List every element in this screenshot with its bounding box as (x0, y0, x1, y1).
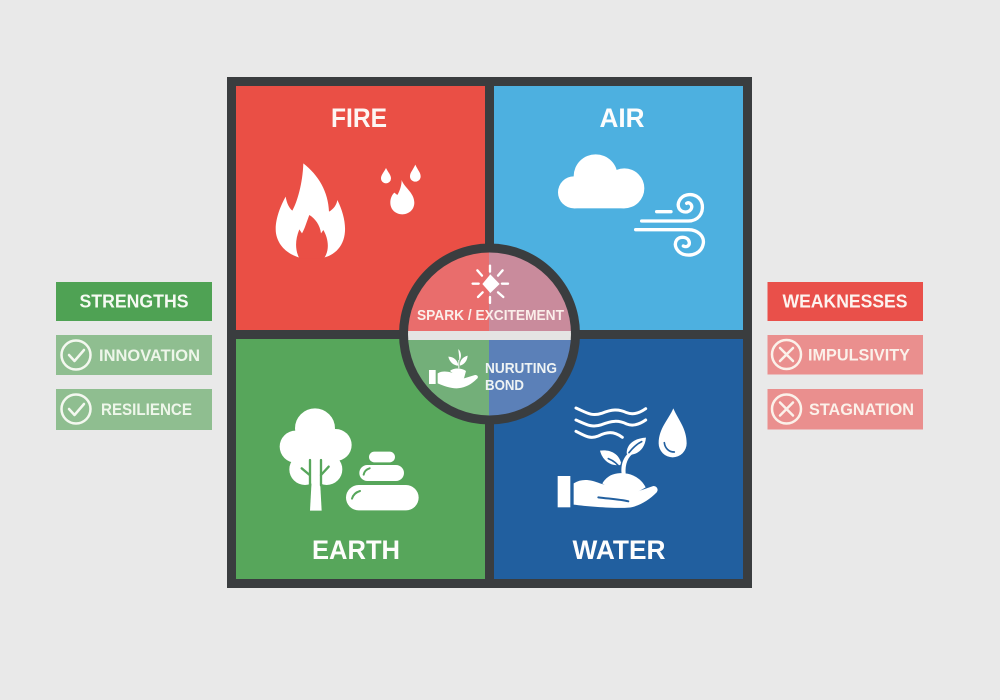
heading: strengths (56, 282, 212, 321)
panel: weaknesses (768, 282, 923, 430)
item: stagnation (768, 389, 923, 430)
heading: water: WATER (572, 535, 666, 565)
icon: cloud and wind (558, 154, 703, 255)
item: stagnation: STAGNATION (809, 400, 914, 419)
panel: four elements matrix (227, 77, 752, 588)
panel: air (494, 86, 743, 330)
panel: strengths (56, 282, 212, 430)
label: spark / excitement: SPARK / EXCITEMENT (417, 307, 564, 324)
panel: earth (236, 339, 485, 579)
label: nurturing bond: NURUTING (485, 360, 557, 377)
item: innovation: INNOVATION (99, 346, 200, 365)
icon: waves, droplet and hand holding sprout (558, 408, 687, 508)
heading: air: AIR (600, 103, 644, 133)
heading: earth: EARTH (312, 535, 400, 565)
icon: tree and stacked stones (280, 408, 419, 511)
panel: fire (236, 86, 485, 330)
item: resilience: RESILIENCE (101, 400, 192, 419)
item: impulsivity: IMPULSIVITY (808, 346, 911, 364)
label: nurturing bond (485, 360, 557, 394)
heading: strengths: STRENGTHS (80, 290, 188, 312)
panel: center overlap circle (399, 244, 580, 429)
heading: weaknesses (768, 282, 923, 321)
heading: fire: FIRE (331, 103, 387, 133)
icon: hand with sprout (429, 349, 478, 388)
label: nurturing bond: BOND (485, 377, 524, 394)
item: impulsivity (768, 335, 923, 374)
panel: water (494, 339, 743, 579)
item: innovation (56, 335, 212, 375)
icon: flame and small flame with droplets (276, 163, 421, 258)
heading: weaknesses: WEAKNESSES (782, 290, 908, 312)
item: resilience (56, 389, 212, 430)
icon: spark (473, 266, 508, 303)
